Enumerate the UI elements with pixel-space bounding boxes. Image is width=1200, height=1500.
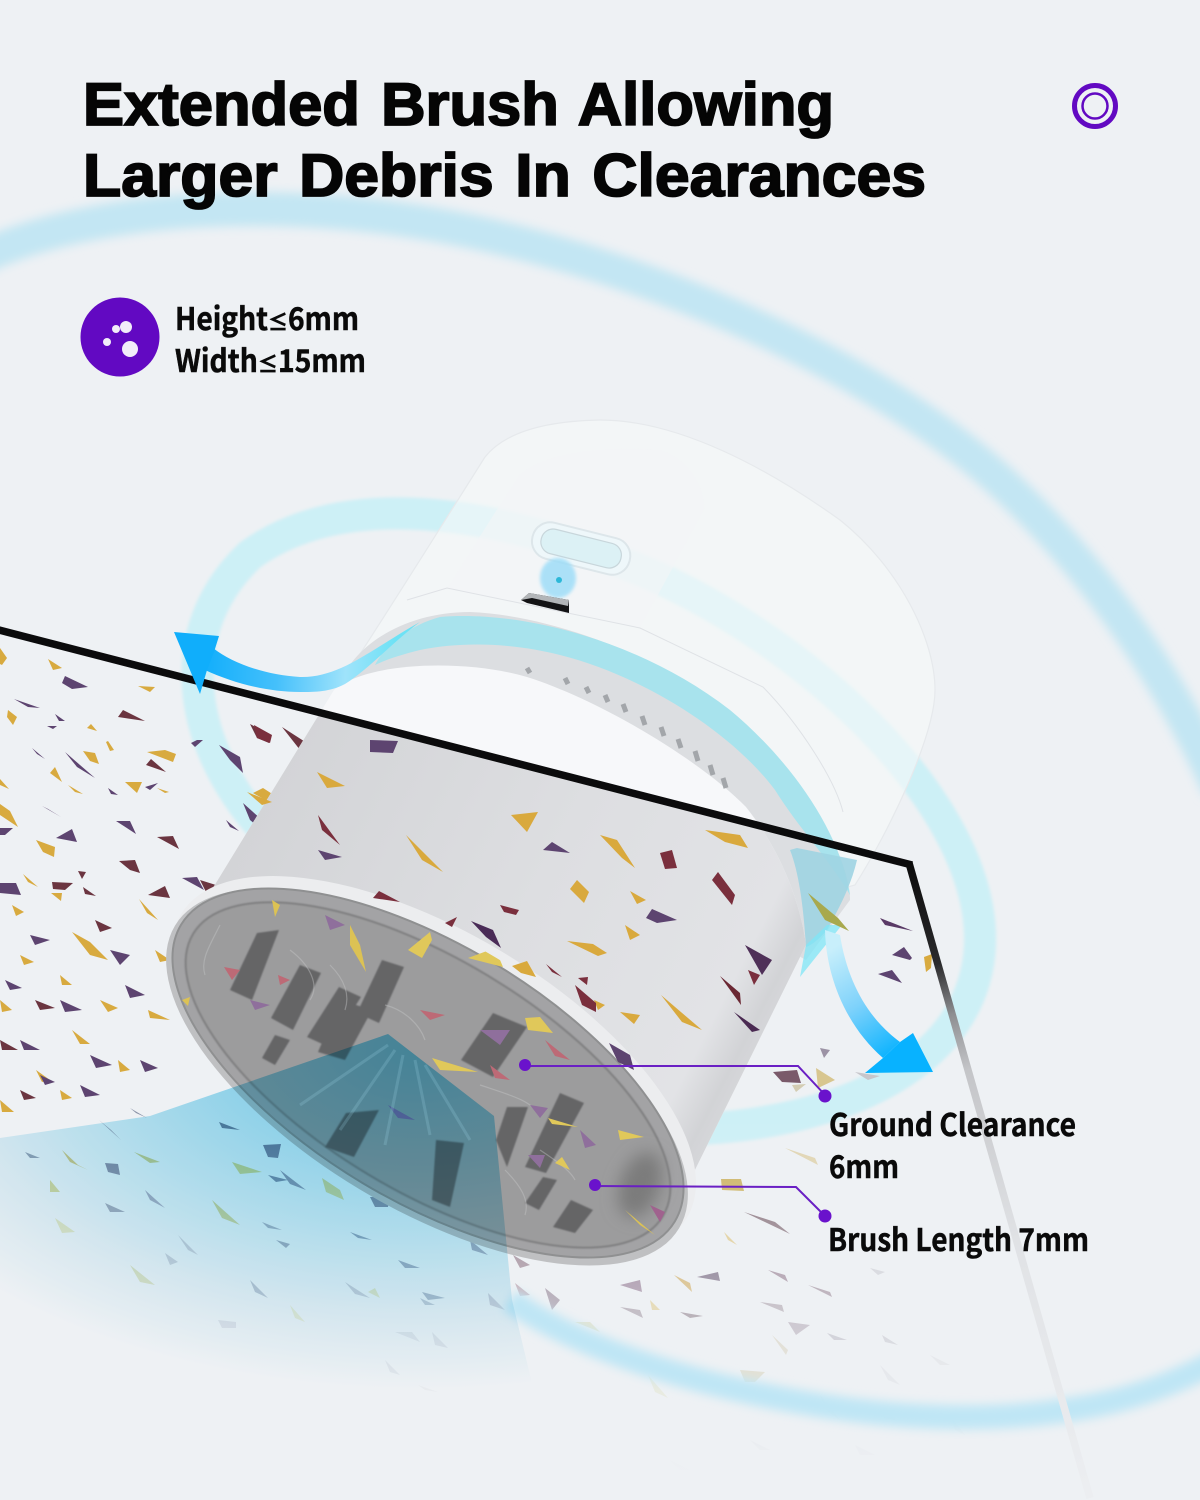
airflow ring: large upper sweep: [0, 209, 1200, 790]
glass edge lines: [0, 629, 1090, 1498]
callout: ground clearance: 6mm: [829, 1142, 899, 1187]
airflow rings: [0, 209, 1200, 1130]
device: brush bars: [230, 930, 593, 1233]
debris size spec: [80, 294, 366, 381]
callout: brush length: [589, 1179, 1089, 1260]
floor fade overlay: [0, 1120, 1200, 1500]
device confetti: [182, 725, 772, 1235]
cyan band on ring: [375, 616, 850, 895]
device: dark shadow blotch on disc: [610, 1146, 670, 1224]
title: Larger Debris In Clearances: [83, 142, 926, 209]
device: inner disc tone: [133, 834, 723, 1316]
icon: usb port: [521, 593, 569, 613]
device: upper translucent dome: [330, 420, 935, 900]
callout: ground clearance: [519, 1059, 1076, 1187]
floor confetti: [0, 648, 965, 1470]
right-side debris: [721, 918, 932, 1245]
callout: brush length: Brush Length 7mm: [828, 1215, 1089, 1260]
icon: led indicator: [540, 558, 576, 598]
airflow ring: bottom sweep: [510, 1300, 1200, 1417]
device: lower cylinder body: [214, 716, 806, 1170]
device: base lower lip: [108, 813, 746, 1341]
icon: debris dots: [80, 298, 160, 376]
title: [83, 71, 926, 209]
debris: olive shard at arrow start: [808, 893, 849, 931]
icon: power button: [528, 518, 634, 579]
title: Extended Brush Allowing: [83, 71, 834, 138]
debris on cylinder: [247, 725, 772, 1070]
device: vent ring: [334, 612, 850, 960]
device: clear base disc: [115, 815, 741, 1331]
device: disc sheen lines: [204, 925, 575, 1215]
suction rays on disc: [300, 1045, 470, 1145]
device: lower cylinder white cap: [175, 666, 806, 1180]
arrow: right airflow: [825, 930, 933, 1073]
device: base highlight rim: [113, 800, 755, 1332]
black top edge: [0, 629, 912, 865]
air suction cone: [0, 1034, 560, 1500]
vent slots: [527, 668, 726, 788]
spec text: Height≤6mm: [175, 294, 359, 339]
gold debris: [0, 648, 277, 1112]
fading side edge: [909, 863, 1090, 1498]
arrow: left airflow: [174, 622, 420, 694]
maroon debris: [0, 710, 310, 1100]
callout: ground clearance: Ground Clearance: [829, 1100, 1076, 1145]
device: bright cyan glow below edge: [800, 925, 842, 977]
debris on base disc: [182, 900, 665, 1235]
device: blue tint around cylinder edge: [790, 848, 857, 947]
icon: purple concentric rings: [1074, 86, 1116, 126]
fading lower debris: [25, 1108, 965, 1470]
device: front panel with button: [407, 449, 843, 812]
spec text: [175, 294, 366, 381]
vacuum device: [166, 500, 920, 1266]
airflow ring: device loop: [198, 513, 980, 1130]
plum debris: [0, 676, 262, 1097]
spec text: Width≤15mm: [175, 336, 366, 381]
